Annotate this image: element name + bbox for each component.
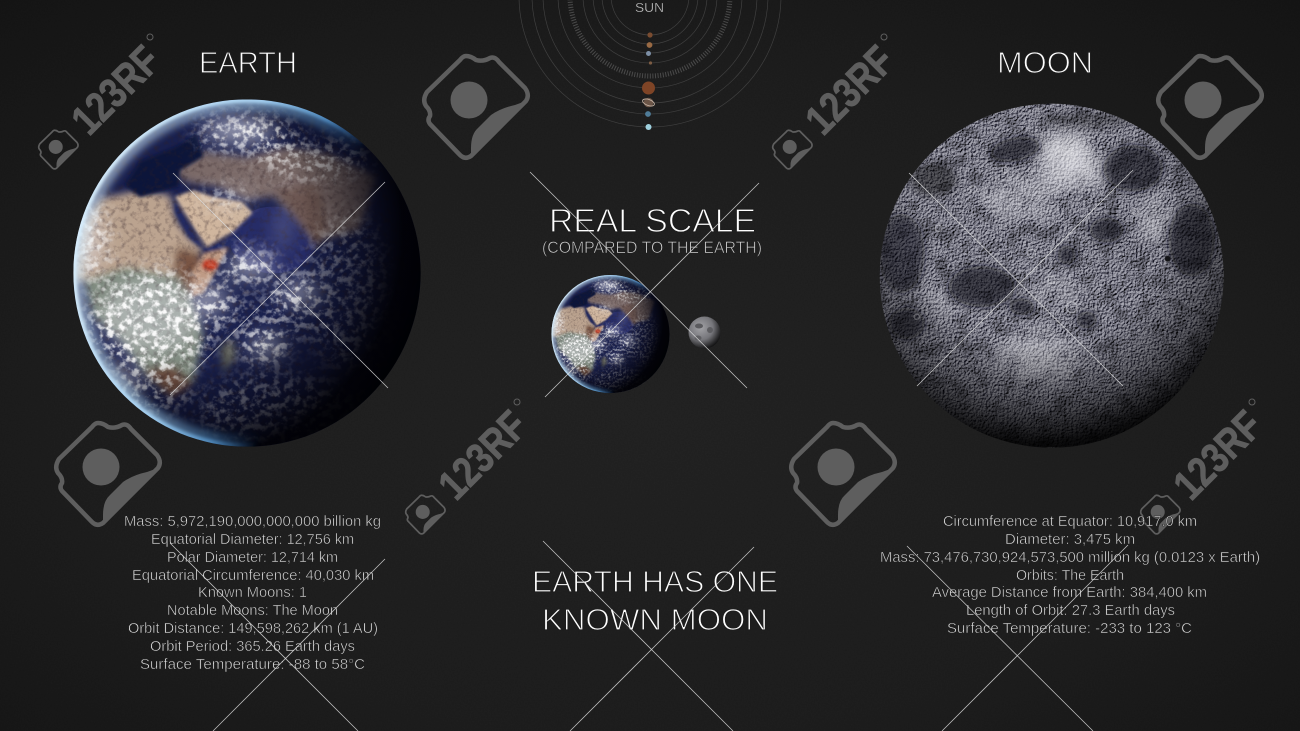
- earth facts: Known Moons: 1: [198, 585, 307, 601]
- earth facts: [124, 514, 381, 673]
- planet: venus: [647, 42, 652, 48]
- orbit rings: [519, 0, 781, 127]
- planet: moon large: [870, 90, 1240, 460]
- moon facts: [880, 514, 1260, 637]
- watermark: 123RF logo lower right: [1141, 399, 1271, 534]
- moon facts: Mass: 73,476,730,924,573,500 million kg (0.0123 x Earth): [880, 550, 1260, 566]
- earth facts: Orbit Period: 365.26 Earth days: [150, 639, 355, 655]
- earth facts: Orbit Distance: 149,598,262 km (1 AU): [128, 621, 378, 637]
- watermark: 123RF logo lower centre left: [406, 399, 536, 534]
- watermark: top row egg icon left: [424, 56, 528, 158]
- planet: earth small scale: [547, 272, 676, 398]
- planet: earth: [646, 51, 651, 56]
- heading: earth has one known moon: EARTH HAS ONE: [532, 564, 778, 599]
- planet: uranus: [645, 111, 651, 117]
- watermark: 123RF logo lower right: 123RF: [1164, 402, 1271, 508]
- watermark: 123RF logo top left: [39, 34, 169, 169]
- sun label: SUN: [635, 0, 664, 15]
- earth facts: Mass: 5,972,190,000,000,000 billion kg: [124, 514, 381, 530]
- solar system diagram: [519, 0, 781, 130]
- planet: saturn: [642, 98, 655, 107]
- watermark: lower row egg icon left: [56, 423, 160, 525]
- planet: earth large: [60, 90, 440, 460]
- earth facts: Polar Diameter: 12,714 km: [167, 550, 338, 566]
- watermark: 123RF logo top left: 123RF: [62, 37, 169, 143]
- earth facts: Notable Moons: The Moon: [167, 603, 338, 619]
- subheading: compared to the earth: (COMPARED TO THE EARTH): [542, 239, 762, 257]
- title: earth: EARTH: [199, 45, 297, 80]
- earth facts: Equatorial Circumference: 40,030 km: [132, 568, 374, 584]
- planet: jupiter: [642, 82, 655, 94]
- watermark: lower row egg icon right: [791, 423, 895, 525]
- moon facts: Surface Temperature: -233 to 123 °C: [947, 621, 1192, 637]
- heading: earth has one known moon: KNOWN MOON: [542, 602, 768, 637]
- earth facts: Equatorial Diameter: 12,756 km: [151, 532, 354, 548]
- planet: mercury: [647, 32, 653, 38]
- planet: neptune: [646, 124, 652, 130]
- planet: moon small scale: [688, 316, 720, 348]
- watermark: 123RF logo top centre right: 123RF: [796, 37, 903, 143]
- planet: mars: [649, 61, 652, 65]
- moon facts: Average Distance from Earth: 384,400 km: [932, 585, 1207, 601]
- moon facts: Orbits: The Earth: [1016, 568, 1124, 584]
- heading: earth has one known moon: [532, 564, 778, 637]
- watermark: 123RF logo lower centre left: 123RF: [429, 402, 536, 508]
- watermark: top row egg icon right: [1158, 56, 1262, 158]
- moon facts: Diameter: 3,475 km: [1005, 532, 1135, 548]
- watermark: 123RF logo top centre right: [773, 34, 903, 169]
- earth facts: Surface Temperature: -88 to 58°C: [140, 657, 365, 673]
- moon facts: Circumference at Equator: 10,917.0 km: [943, 514, 1197, 530]
- heading: real scale: REAL SCALE: [549, 202, 756, 239]
- moon facts: Length of Orbit: 27.3 Earth days: [966, 603, 1175, 619]
- title: moon: MOON: [997, 45, 1093, 80]
